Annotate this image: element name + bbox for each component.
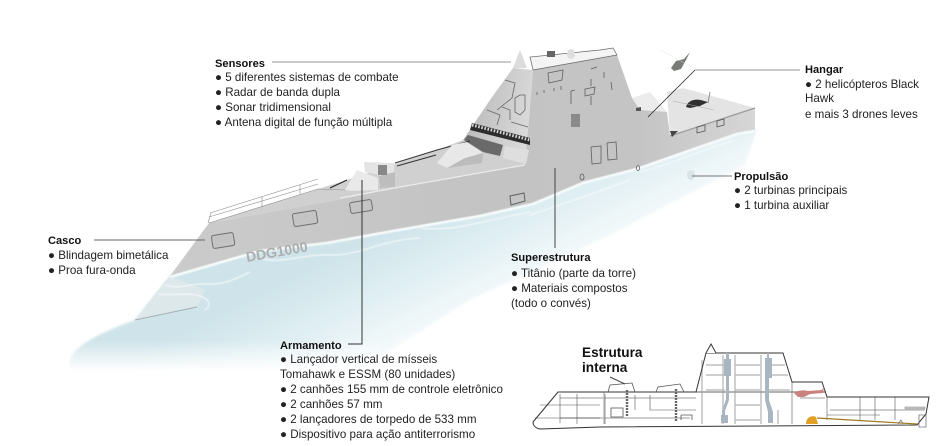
label: Armamento: ● 2 canhões 57 mm	[280, 398, 382, 411]
hull windows	[211, 199, 373, 249]
label: Armamento: Tomahawk e ESSM (80 unidades)	[280, 368, 455, 381]
label: Sensores: Sensores	[215, 58, 265, 70]
label: Hangar: Hangar	[805, 64, 844, 76]
gun turret 1	[345, 170, 378, 191]
label: Casco: ● Proa fura-onda	[48, 264, 136, 277]
missile cells	[611, 408, 692, 420]
mast	[706, 344, 716, 353]
label: Hangar: Hawk	[805, 92, 834, 105]
label: Hangar	[648, 64, 919, 121]
helicopter silhouette	[794, 387, 824, 397]
side panels	[510, 67, 640, 205]
gun turret 2	[364, 162, 395, 188]
hull side	[170, 55, 755, 276]
water wake	[50, 129, 757, 372]
radar dome	[567, 49, 575, 59]
railing	[208, 179, 345, 223]
label: Propulsão: ● 1 turbina auxiliar	[734, 199, 829, 212]
label: Superestrutura: ● Materiais compostos	[511, 282, 628, 295]
turbine and shaft	[806, 416, 818, 424]
mast	[513, 50, 527, 68]
helicopter flying	[660, 50, 696, 71]
flight deck	[667, 88, 755, 136]
black structure lines	[535, 382, 895, 424]
ship: DDG1000 destroyer	[170, 48, 755, 277]
label: Sensores: ● 5 diferentes sistemas de combate	[215, 71, 399, 84]
label: Armamento: Armamento	[280, 340, 342, 352]
label: Superestrutura: ● Titânio (parte da torre)	[511, 267, 636, 280]
hangar door	[905, 407, 925, 409]
label: Propulsão: Propulsão	[734, 171, 788, 183]
label: Sensores: ● Antena digital de função múltipla	[215, 116, 393, 129]
helicopter on deck	[673, 92, 714, 110]
foredeck	[209, 140, 525, 223]
label: Armamento: ● 2 canhões 155 mm de controle eletrônico	[280, 383, 503, 396]
missile ladders	[627, 389, 676, 422]
tower glass band	[470, 123, 530, 145]
internal structure diagram	[533, 344, 929, 429]
label: Armamento	[280, 180, 503, 441]
propulsion pod	[687, 170, 695, 180]
tower roof	[530, 48, 617, 70]
hull label DDG1000: DDG1000	[245, 238, 309, 265]
label: Propulsão	[692, 171, 848, 212]
label: Superestrutura: (todo o convés)	[511, 297, 591, 310]
label: Casco: Casco	[48, 235, 82, 247]
label: Superestrutura	[511, 168, 636, 310]
label: Hangar: ● 2 helicópteros Black	[805, 78, 919, 91]
label: Sensores: ● Sonar tridimensional	[215, 101, 331, 114]
hangar block	[632, 92, 667, 112]
label: Sensores	[215, 58, 511, 129]
tower front face	[463, 68, 533, 164]
foam in water	[158, 140, 735, 310]
label: Casco: ● Blindagem bimetálica	[48, 249, 169, 262]
ship outline	[533, 353, 929, 429]
label: Armamento: ● Dispositivo para ação antiterrorismo	[280, 428, 475, 441]
hatch marks on tower	[571, 114, 580, 127]
label: Hangar: e mais 3 drones leves	[805, 108, 918, 121]
front face panels	[487, 80, 528, 127]
label: Propulsão: ● 2 turbinas principais	[734, 184, 848, 197]
diagram title: Estrutura	[582, 345, 643, 360]
exhaust stacks	[721, 353, 773, 423]
label: Armamento: ● Lançador vertical de mísseis	[280, 353, 437, 366]
label: Casco	[48, 235, 205, 277]
label: Armamento: ● 2 lançadores de torpedo de 533 mm	[280, 413, 476, 426]
label: Sensores: ● Radar de banda dupla	[215, 86, 341, 99]
director	[547, 51, 555, 57]
foam waterline	[170, 131, 755, 277]
diagram title: interna	[582, 360, 628, 375]
submerged bow	[135, 276, 205, 320]
label: Superestrutura: Superestrutura	[511, 252, 591, 264]
turrets	[608, 383, 684, 392]
bridge glass	[464, 135, 503, 156]
grey deck lines	[560, 355, 925, 424]
missile deckhouse	[437, 142, 483, 168]
